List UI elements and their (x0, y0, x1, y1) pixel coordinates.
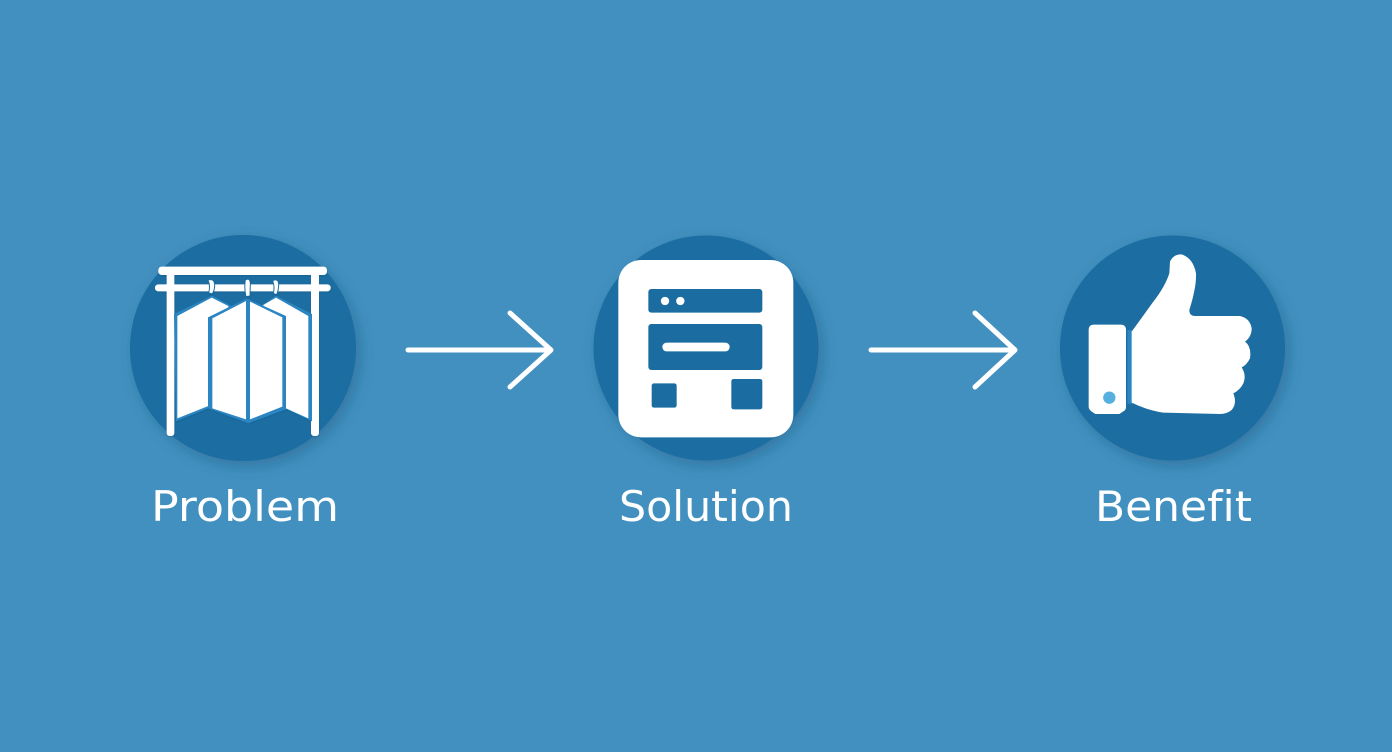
label: Benefit: Benefit (1095, 482, 1252, 531)
panel: problem (130, 235, 356, 531)
icon: solution circle (594, 236, 818, 460)
label: Solution: Solution (619, 482, 793, 531)
icon: thumbs up (1089, 254, 1252, 414)
icon: benefit circle (1060, 236, 1285, 460)
panel: solution (594, 236, 818, 531)
arrow: problem to solution (408, 313, 551, 387)
label: Problem: Problem (151, 482, 339, 531)
icon: hanging folding screens on a rack (155, 267, 331, 436)
panel: benefit (1060, 236, 1285, 531)
icon: problem circle (130, 235, 356, 461)
icon: app interface window (618, 260, 793, 437)
arrow: solution to benefit (871, 313, 1015, 387)
